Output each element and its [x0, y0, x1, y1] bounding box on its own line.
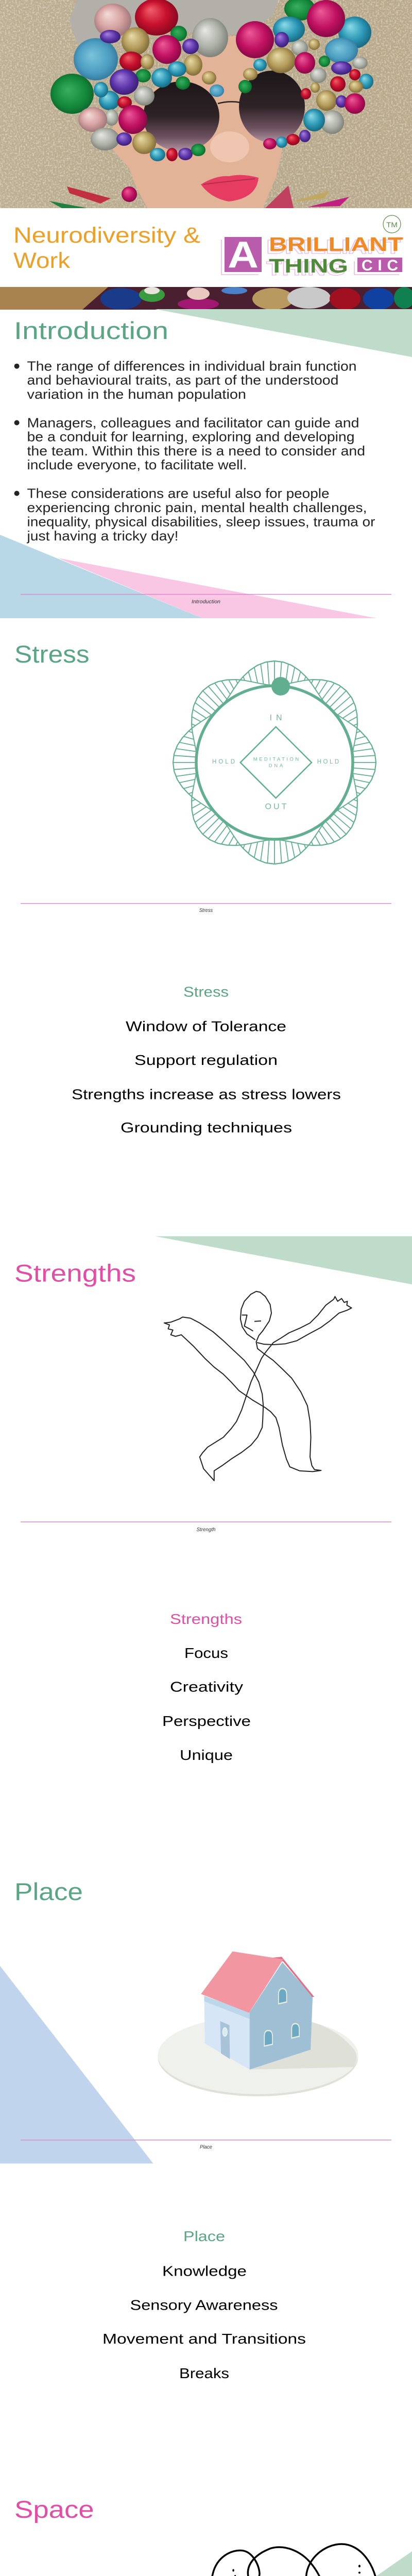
bullet list: The range of differences in individual brain function: [27, 359, 356, 374]
hero photo: woman in bauble sunglasses: [0, 0, 412, 208]
diagram: meditation DNA mandala: HOLD: [317, 759, 339, 765]
illustration: looped cloud: [175, 2544, 390, 2576]
slide: strengths: [14, 1236, 412, 1533]
diagram: meditation DNA mandala: MEDITATION: [253, 757, 299, 762]
illustration: house on round platform: [158, 1952, 358, 2096]
bullet list: and behavioural traits, as part of the understood: [27, 372, 339, 388]
bullet list: These considerations are useful also for people: [27, 485, 329, 501]
diagram: meditation DNA mandala: [173, 661, 376, 864]
slide: stress: [14, 640, 391, 913]
bullet list: the team. Within this there is a need to consider and: [27, 443, 365, 459]
bullet list: experiencing chronic pain, mental health challenges,: [27, 500, 367, 515]
logo: A Brilliant Thing CIC: BRILLIANT: [266, 236, 401, 258]
text block: stress points: [72, 984, 341, 1136]
diagram: meditation DNA mandala: IN: [270, 714, 282, 722]
slide: space: [14, 2496, 412, 2576]
main title: Neurodiversity &: [13, 223, 200, 248]
logo: A Brilliant Thing CIC: BRILLIANT: [269, 234, 403, 256]
hero photo lower strip: colourful costume: [0, 287, 412, 310]
caption: Introduction: Introduction: [192, 599, 220, 605]
text block: stress points: Grounding techniques: [121, 1120, 292, 1136]
text block: strengths points: [162, 1611, 251, 1763]
logo: A Brilliant Thing CIC: [221, 215, 403, 280]
logo: A Brilliant Thing CIC: THING: [266, 258, 346, 280]
text block: place points: Sensory Awareness: [130, 2297, 278, 2313]
text block: place points: Breaks: [179, 2365, 229, 2381]
heading: Space: Space: [14, 2496, 94, 2523]
text block: strengths points: Perspective: [162, 1713, 251, 1729]
bullet list: Managers, colleagues and facilitator can guide and: [27, 415, 359, 431]
logo: A Brilliant Thing CIC: TM: [386, 221, 398, 229]
text block: stress points: Window of Tolerance: [126, 1019, 286, 1035]
text block: strengths points: Focus: [184, 1645, 228, 1661]
bullet list: be a conduit for learning, exploring and developing: [27, 429, 355, 445]
bullet list: include everyone, to facilitate well.: [27, 457, 247, 472]
diagram: meditation DNA mandala: OUT: [265, 803, 287, 811]
text block: place points: [102, 2228, 306, 2381]
bullet list: inequality, physical disabilities, sleep issues, trauma or: [27, 514, 375, 529]
logo: A Brilliant Thing CIC: THING: [269, 256, 348, 277]
caption: Place: Place: [200, 2145, 212, 2150]
illustration: dancing line figure: [164, 1292, 352, 1481]
slide: introduction: [0, 309, 412, 618]
heading: Place: Place: [14, 1878, 83, 1905]
text block: stress points: Support regulation: [134, 1052, 278, 1068]
subheading: Strengths: Strengths: [170, 1611, 242, 1627]
heading: Strengths: Strengths: [14, 1259, 136, 1287]
diagram: meditation DNA mandala: DNA: [269, 763, 283, 769]
text block: strengths points: Unique: [180, 1747, 233, 1763]
main title: Work: [13, 248, 71, 273]
main title: [13, 223, 200, 273]
heading: Stress: Stress: [14, 640, 90, 668]
bullet list: just having a tricky day!: [26, 528, 179, 544]
slide: place: [0, 1878, 391, 2163]
subheading: Stress: Stress: [183, 984, 229, 1000]
text block: strengths points: Creativity: [170, 1679, 243, 1694]
bullet list: [14, 359, 375, 544]
bullet list: variation in the human population: [27, 386, 246, 402]
diagram: meditation DNA mandala: HOLD: [212, 759, 235, 765]
heading: Introduction: Introduction: [14, 317, 168, 344]
caption: Strength: Strength: [197, 1527, 216, 1533]
logo: A Brilliant Thing CIC: CIC: [362, 257, 398, 274]
caption: Stress: Stress: [199, 908, 213, 913]
text block: place points: Knowledge: [162, 2263, 247, 2279]
logo: A Brilliant Thing CIC: A: [228, 234, 259, 276]
subheading: Place: Place: [183, 2228, 225, 2244]
text block: place points: Movement and Transitions: [102, 2331, 306, 2347]
title band: [0, 208, 412, 287]
text block: stress points: Strengths increase as stress lowers: [72, 1087, 341, 1103]
